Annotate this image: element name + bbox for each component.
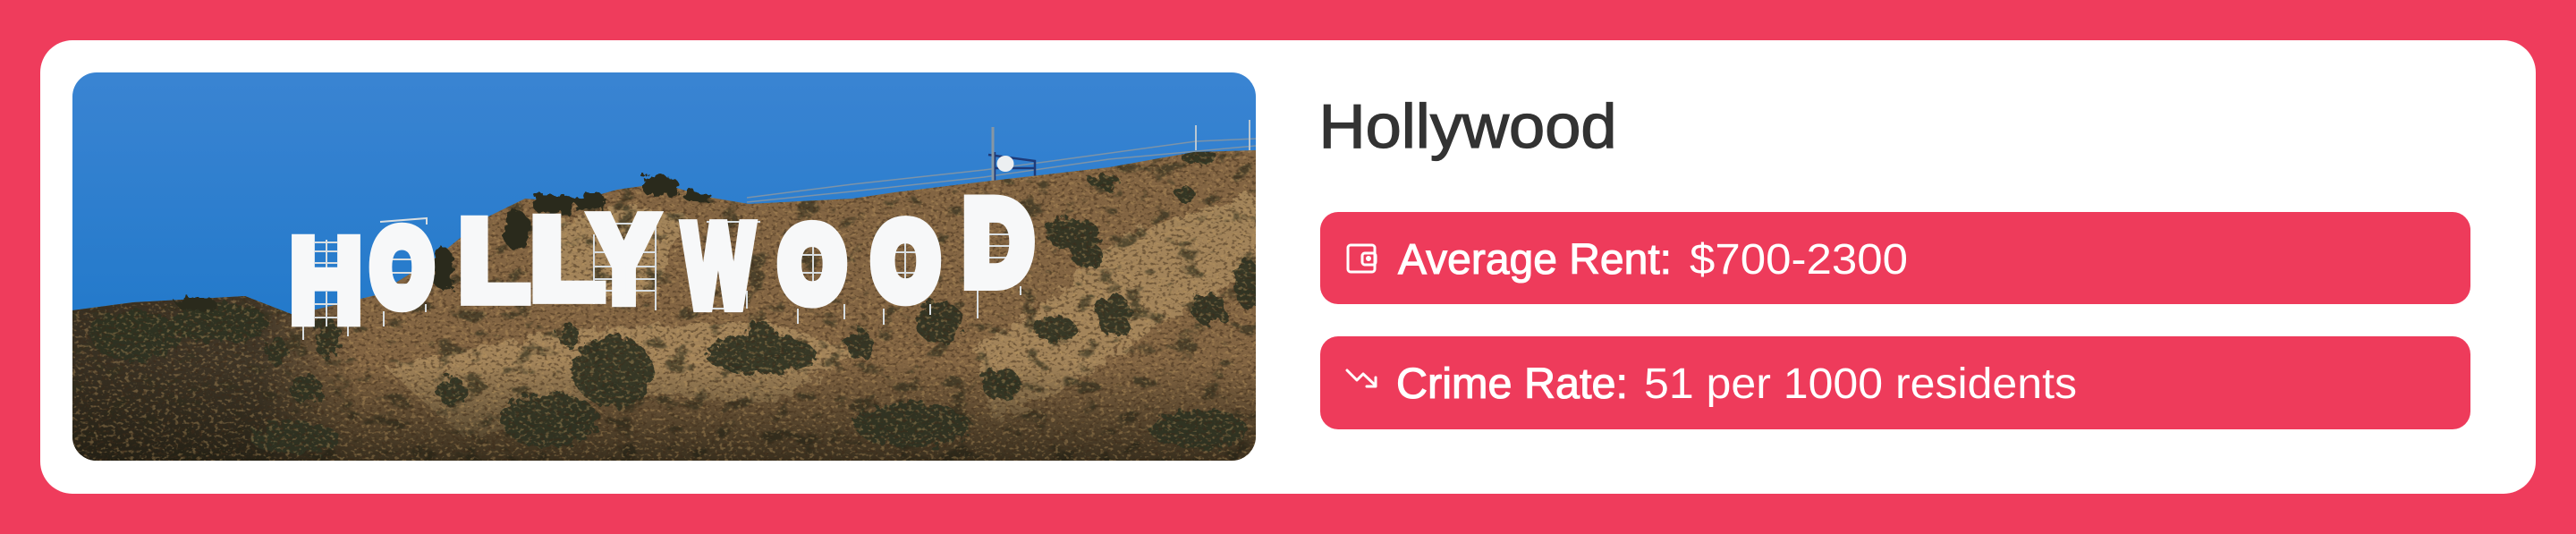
rock specks — [72, 143, 1256, 461]
heading: Hollywood — [1318, 91, 1617, 161]
sign letters — [292, 195, 1035, 327]
stat row: crime rate — [1320, 336, 2470, 429]
sky — [72, 72, 1256, 332]
sign letters: O — [873, 201, 938, 320]
stat row: average rent — [1320, 212, 2470, 304]
left tree mass — [72, 295, 359, 461]
sign letters: Y — [591, 191, 657, 327]
shadow specks — [72, 143, 1256, 461]
hilltop fence and antenna — [747, 120, 1256, 202]
sign letters: O — [780, 208, 844, 322]
sign scaffolding — [303, 218, 1021, 340]
sign letters: O — [372, 209, 432, 326]
icon: wallet — [1348, 245, 1376, 272]
value: average rent: $700-2300 — [1690, 236, 1908, 284]
sign letters: H — [289, 212, 363, 348]
icon: trending down arrow — [1347, 370, 1376, 386]
organic bush texture — [72, 143, 1256, 461]
sign letters: W — [683, 200, 753, 332]
dark foreground shade — [72, 362, 1256, 461]
sign letters: L — [458, 195, 530, 326]
photo: Hollywood sign on hillside — [72, 72, 1260, 461]
hillside light earth patches — [385, 192, 1256, 438]
sign letters: L — [530, 195, 605, 324]
value: crime rate: 51 per 1000 residents — [1644, 360, 2077, 408]
sign letters: D — [963, 175, 1033, 309]
bushes — [89, 148, 1260, 454]
trees on the ridge — [177, 175, 712, 312]
label: average rent: Average Rent: — [1398, 236, 1672, 284]
hillside — [72, 143, 1260, 461]
label: crime rate: Crime Rate: — [1396, 360, 1628, 408]
